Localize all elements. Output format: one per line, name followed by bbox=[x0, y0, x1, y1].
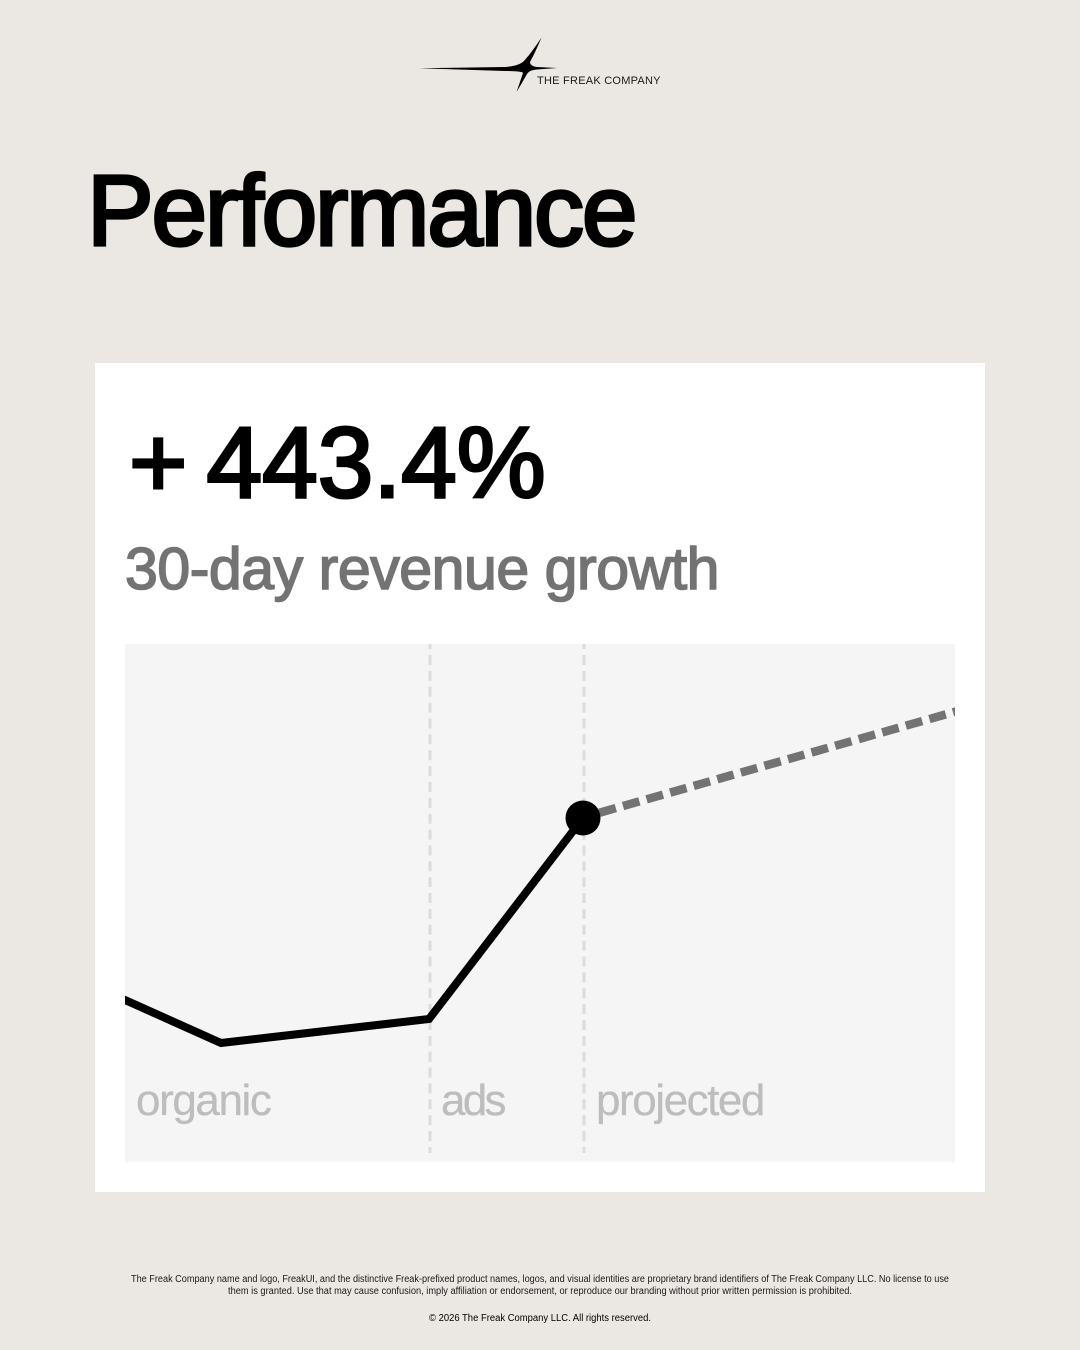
metric subtitle: 30-day revenue growth bbox=[125, 536, 719, 602]
current value marker bbox=[566, 800, 600, 836]
revenue line bbox=[115, 818, 583, 1043]
label: projected: projected bbox=[596, 1076, 764, 1125]
label: organic: organic bbox=[136, 1076, 271, 1125]
legal footer: The Freak Company name and logo, FreakUI, and the distinctive Freak-prefixed product names, logos, and visual identities are proprietary brand identifiers of The Freak Company LLC. No license to use bbox=[131, 1274, 949, 1285]
metric: growth percentage: 443.4% bbox=[206, 407, 546, 519]
line chart bbox=[115, 644, 970, 1162]
company name: THE FREAK COMPANY bbox=[537, 75, 661, 87]
projected dashed line bbox=[583, 708, 970, 817]
legal footer bbox=[131, 1274, 949, 1324]
title: Performance bbox=[87, 155, 635, 267]
icon: four-point star mark bbox=[419, 38, 557, 92]
label: ads: ads bbox=[441, 1076, 506, 1125]
copyright: © 2026 The Freak Company LLC. All rights reserved. bbox=[429, 1313, 651, 1324]
metric: growth percentage: + bbox=[129, 407, 187, 519]
logo: The Freak Company bbox=[419, 38, 661, 92]
panel: revenue growth card bbox=[95, 363, 985, 1192]
legal footer: them is granted. Use that may cause confusion, imply affiliation or endorsement, or reproduce our branding without prior written permission is prohibited. bbox=[228, 1286, 852, 1297]
